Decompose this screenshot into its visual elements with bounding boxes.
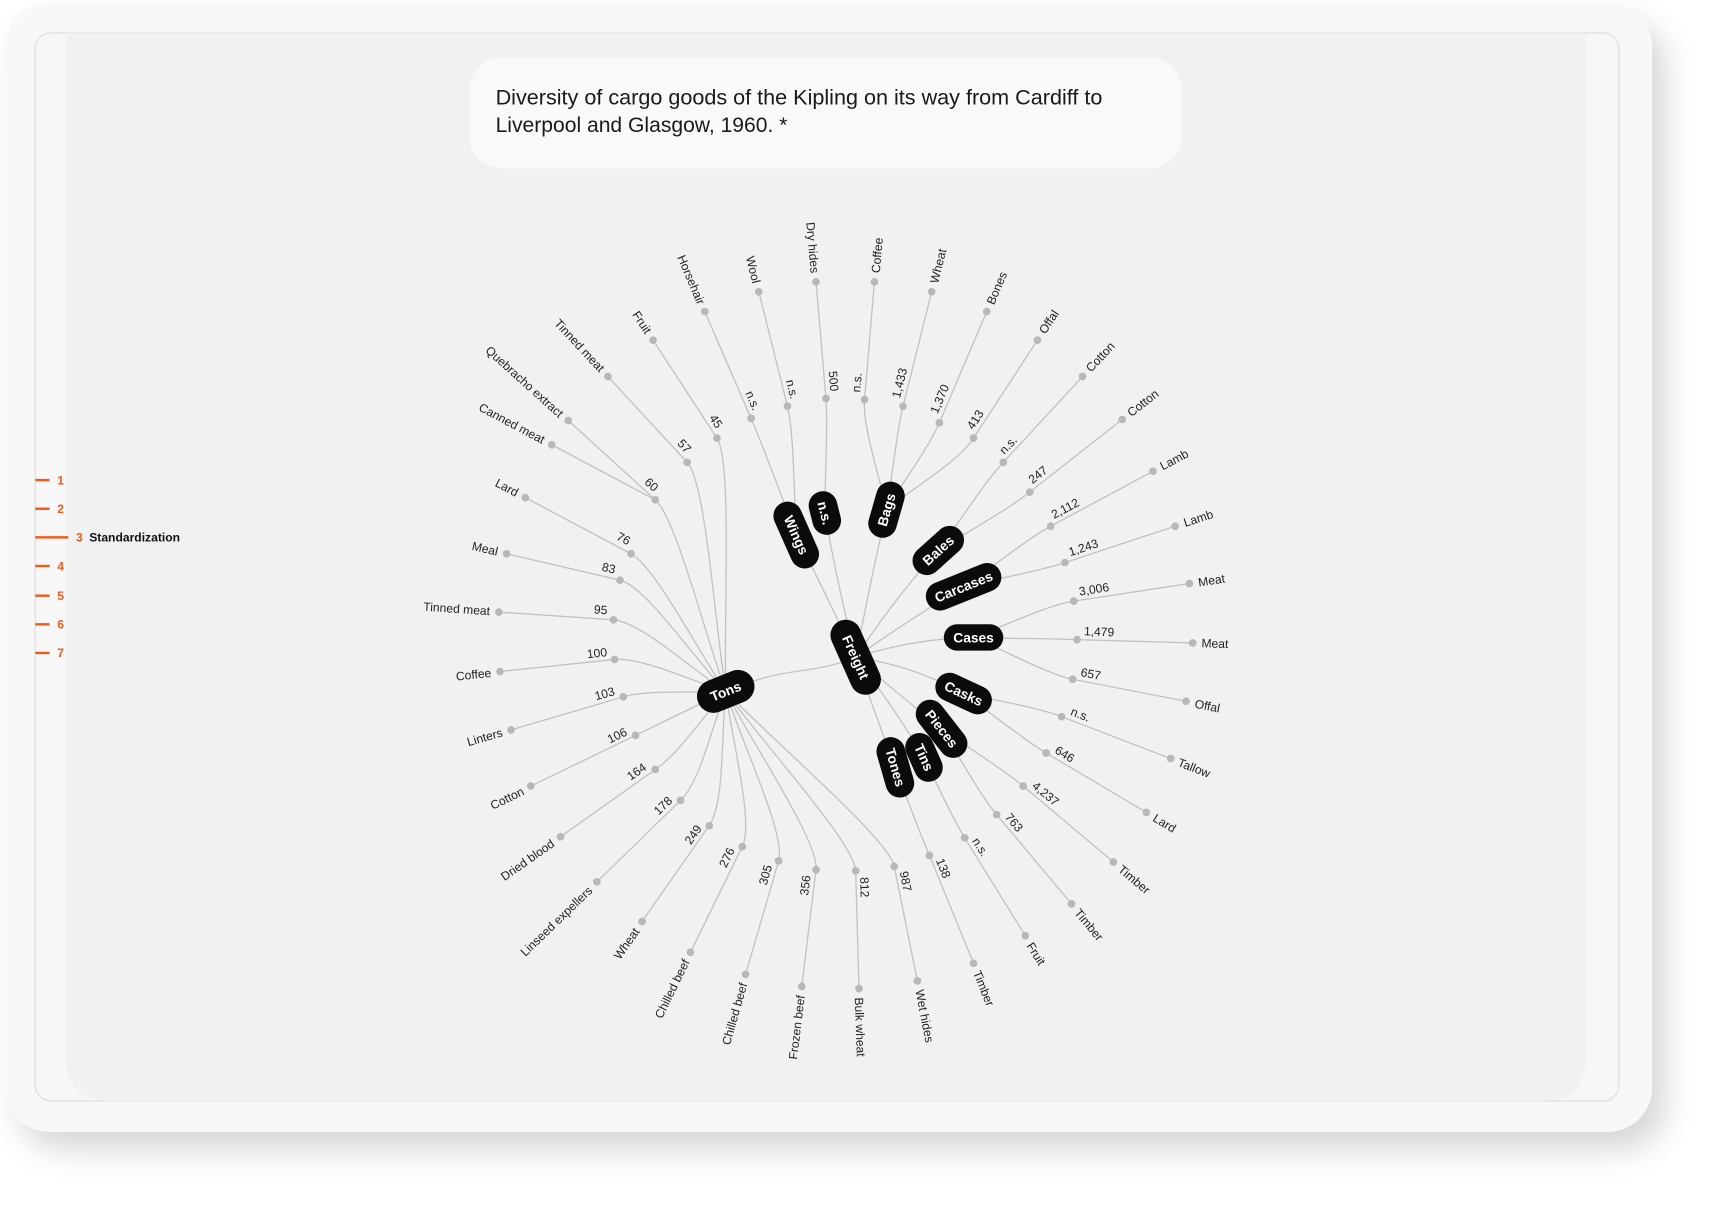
branches: Tons: Wet hides	[912, 988, 936, 1044]
branches: Freight: 2,112	[1049, 495, 1082, 522]
radial tree chart	[423, 221, 1229, 1060]
pill: Bags	[865, 478, 908, 541]
branches: Freight: 3,006	[1078, 580, 1110, 599]
pill: Casks: Casks	[942, 679, 985, 709]
side navigation: 1	[57, 473, 64, 487]
branches: Tons: Canned meat	[476, 400, 548, 447]
pill: Cases	[944, 624, 1003, 651]
branches: Freight: n.s.	[996, 433, 1020, 457]
pill: Pieces	[910, 694, 973, 764]
branches: Tons: Chilled beef	[652, 956, 693, 1021]
branches: Tons: Frozen beef	[786, 994, 808, 1060]
side navigation: 7	[57, 646, 64, 660]
branches: Freight: Meat	[1197, 571, 1227, 590]
branches: Freight: 1,433	[889, 366, 910, 399]
side navigation: 2	[57, 502, 64, 516]
branches: Freight: Offal	[1194, 697, 1221, 715]
side navigation	[35, 473, 180, 660]
branches: Freight: Wheat	[927, 247, 950, 285]
pill: Tins	[901, 728, 947, 786]
side navigation: 4	[57, 559, 64, 573]
title box: Diversity of cargo goods of the Kipling on its way from Cardiff to	[496, 87, 1102, 110]
pill: n.s.: n.s.	[814, 500, 835, 526]
branches: Tons: 305	[756, 863, 775, 887]
branches: Freight: Lard	[1150, 811, 1178, 836]
branches: Freight: n.s.	[849, 372, 865, 393]
branches: Freight: Dry hides	[803, 221, 822, 274]
branches: Tons: 57	[675, 437, 694, 456]
branches: Freight: 4,237	[1030, 779, 1062, 809]
pill: Wings	[769, 497, 824, 573]
branches: Tons: Cotton	[488, 784, 526, 813]
branches: Tons: Tinned meat	[423, 600, 491, 618]
branches: Freight: Meat	[1201, 636, 1229, 651]
branches: Tons: Lard	[493, 476, 521, 500]
pill: Casks	[931, 668, 997, 719]
side navigation: 5	[57, 589, 64, 603]
branches: Tons: Chilled beef	[719, 981, 751, 1047]
branches: Freight: Cotton	[1083, 339, 1118, 375]
branches: Freight: 1,243	[1067, 536, 1100, 559]
branches: Freight: Fruit	[1024, 940, 1049, 968]
branches: Tons: 95	[593, 602, 608, 617]
pill: Bales: Bales	[920, 533, 957, 569]
branches: Tons: Tinned meat	[551, 316, 608, 375]
branches: Freight: Timber	[1115, 862, 1153, 897]
branches: Tons: Coffee	[455, 666, 492, 684]
branches: Freight: Lamb	[1182, 507, 1215, 530]
branches: Tons: Quebracho extract	[483, 343, 567, 421]
pill: Wings: Wings	[781, 513, 811, 557]
pill: Pieces: Pieces	[922, 707, 961, 751]
branches: Freight: n.s.	[1069, 705, 1092, 725]
branches: Tons: 100	[586, 645, 608, 661]
branches: Freight: Offal	[1036, 308, 1062, 336]
branches: Freight: 1,479	[1084, 624, 1115, 639]
pill: Carcases	[921, 559, 1006, 615]
branches: Freight	[674, 221, 1229, 1008]
branches: Tons: 987	[897, 870, 914, 893]
hub: Freight	[825, 615, 886, 700]
branches: Freight: n.s.	[969, 835, 991, 859]
branches: Freight: Timber	[1072, 906, 1106, 944]
branches: Tons: 60	[642, 475, 661, 495]
branches: Tons: 276	[716, 845, 738, 870]
branches: Freight: Timber	[970, 968, 997, 1008]
pill: Tins: Tins	[911, 742, 936, 774]
branches: Freight: 657	[1080, 665, 1102, 683]
pill: Bales	[907, 520, 970, 581]
branches: Tons: Meal	[471, 539, 499, 559]
branches: Tons: Linseed expellers	[518, 884, 595, 959]
branches: Freight: 138	[933, 856, 954, 880]
branches: Tons: Fruit	[629, 308, 655, 337]
branches: Tons: 164	[624, 760, 649, 783]
branches: Freight: 413	[964, 407, 987, 432]
branches: Freight: Tallow	[1176, 756, 1212, 781]
pill: Tones	[873, 734, 918, 801]
pill: Tones: Tones	[882, 746, 908, 789]
branches: Freight: 763	[1002, 810, 1026, 835]
branches: Freight: 247	[1026, 463, 1050, 487]
branches: Freight: Lamb	[1158, 446, 1191, 473]
branches: Tons: Dried blood	[498, 837, 557, 884]
branches: Tons: 103	[593, 684, 617, 703]
hub: Tons: Tons	[708, 679, 744, 705]
branches: Tons: 83	[601, 560, 617, 577]
branches: Tons	[423, 308, 936, 1060]
branches: Tons: 76	[614, 529, 633, 548]
branches: Freight: Coffee	[869, 237, 886, 274]
branches: Tons: 249	[682, 822, 705, 847]
branches: Tons: 356	[797, 874, 814, 896]
hub: Freight: Freight	[839, 633, 872, 682]
branches: Freight: n.s.	[783, 378, 801, 400]
branches: Freight: n.s.	[743, 389, 763, 412]
branches: Freight: Cotton	[1125, 387, 1161, 420]
hub: Tons	[692, 665, 760, 718]
side navigation: 3	[76, 531, 83, 545]
side navigation: Standardization	[89, 531, 180, 545]
pill: n.s.	[806, 488, 844, 538]
branches: Freight: 1,370	[927, 382, 952, 416]
branches: Freight: 646	[1052, 743, 1077, 766]
branches: Freight: Bones	[984, 270, 1010, 307]
branches: Freight: 500	[826, 370, 841, 392]
branches: Tons: Wheat	[611, 925, 643, 962]
pill: Cases: Cases	[953, 630, 994, 645]
branches: Tons: 45	[706, 412, 726, 431]
branches: Freight: Wool	[743, 255, 763, 285]
pill: Bags: Bags	[875, 491, 899, 528]
side navigation: 6	[57, 618, 64, 632]
branches: Tons: 178	[651, 794, 675, 818]
title box	[469, 57, 1182, 168]
branches: Tons: 106	[605, 725, 630, 746]
branches: Tons: 812	[857, 877, 872, 898]
branches: Tons: Bulk wheat	[852, 997, 868, 1057]
pill: Carcases: Carcases	[933, 569, 995, 605]
branches: Tons: Linters	[465, 726, 504, 749]
branches: Freight: Horsehair	[674, 253, 708, 307]
title box: Liverpool and Glasgow, 1960. *	[496, 114, 787, 137]
